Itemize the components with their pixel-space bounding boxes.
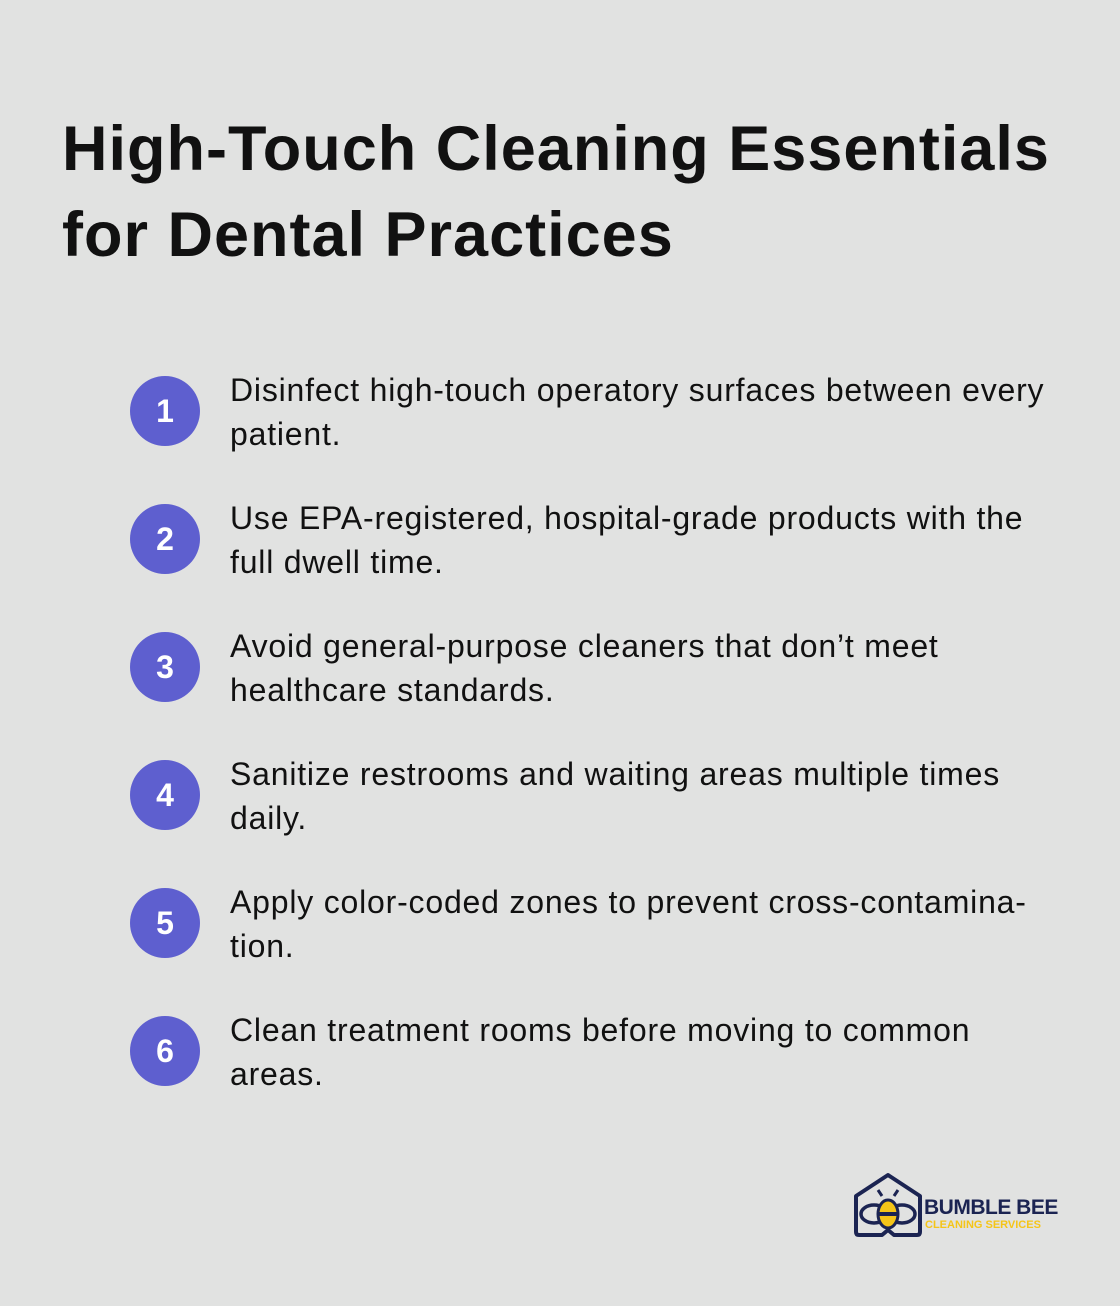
item 6: areas.: [230, 1056, 324, 1092]
title: [62, 114, 1050, 270]
item 1: patient.: [230, 416, 341, 452]
item 5: 5: [156, 905, 174, 941]
item 3: 3: [156, 649, 174, 685]
logo text: BUMBLE BEE: [924, 1196, 1058, 1219]
item 6: 6: [156, 1033, 174, 1069]
item 6: Clean treatment rooms before moving to common: [230, 1012, 970, 1048]
item 2: Use EPA-registered, hospital-grade products with the: [230, 500, 1023, 536]
item 2: full dwell time.: [230, 544, 444, 580]
item 4: Sanitize restrooms and waiting areas multiple times: [230, 756, 1000, 792]
item 4: daily.: [230, 800, 307, 836]
item 3: Avoid general-purpose cleaners that don’t meet: [230, 628, 939, 664]
item 6: [130, 1012, 970, 1092]
title: High-Touch Cleaning Essentials: [62, 114, 1050, 184]
item 5: Apply color-coded zones to prevent cross-contamina-: [230, 884, 1027, 920]
item 1: 1: [156, 393, 174, 429]
item 1: [130, 372, 1044, 452]
logo: CLEANING SERVICES: [925, 1219, 1041, 1231]
title: for Dental Practices: [62, 200, 674, 270]
item 1: Disinfect high-touch operatory surfaces between every: [230, 372, 1044, 408]
item 2: [130, 500, 1023, 580]
item 2: 2: [156, 521, 174, 557]
item 4: [130, 756, 1000, 836]
item 5: tion.: [230, 928, 294, 964]
item 4: 4: [156, 777, 174, 813]
item 3: [130, 628, 939, 708]
item 3: healthcare standards.: [230, 672, 555, 708]
icon: bee house: [854, 1173, 922, 1237]
item 5: [130, 884, 1027, 964]
logo: [854, 1173, 1058, 1237]
